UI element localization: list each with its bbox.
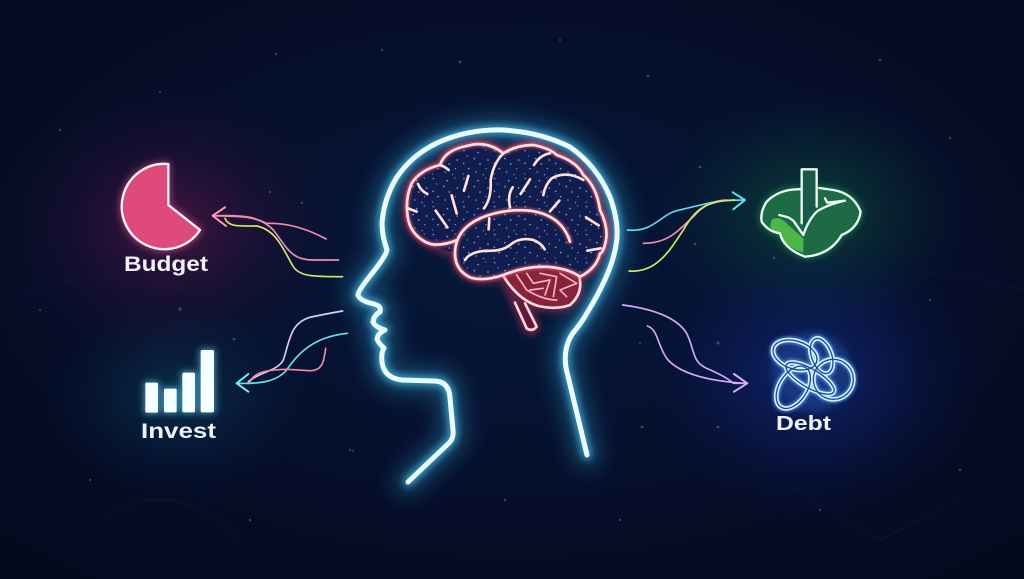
debt label: Debt [776,413,831,435]
savings green growth icon [761,169,861,257]
arrow: brain to savings [627,192,745,271]
invest bar chart icon [144,349,215,414]
brain outlines and folds [407,144,607,279]
brain illustration [407,144,607,331]
arrow: brain to budget [213,207,343,277]
brain glow [407,144,607,331]
budget label: Budget [124,253,208,276]
cerebellum [503,267,580,308]
head silhouette outline [358,130,617,482]
brain stem [515,303,537,330]
brain cerebrum fill with neuron dots [407,144,607,279]
invest label: Invest [141,420,216,443]
arrow: brain to debt [623,305,747,392]
budget pie icon [122,164,200,249]
debt tangled knot icon [769,332,853,415]
arrow: brain to invest [237,311,347,392]
